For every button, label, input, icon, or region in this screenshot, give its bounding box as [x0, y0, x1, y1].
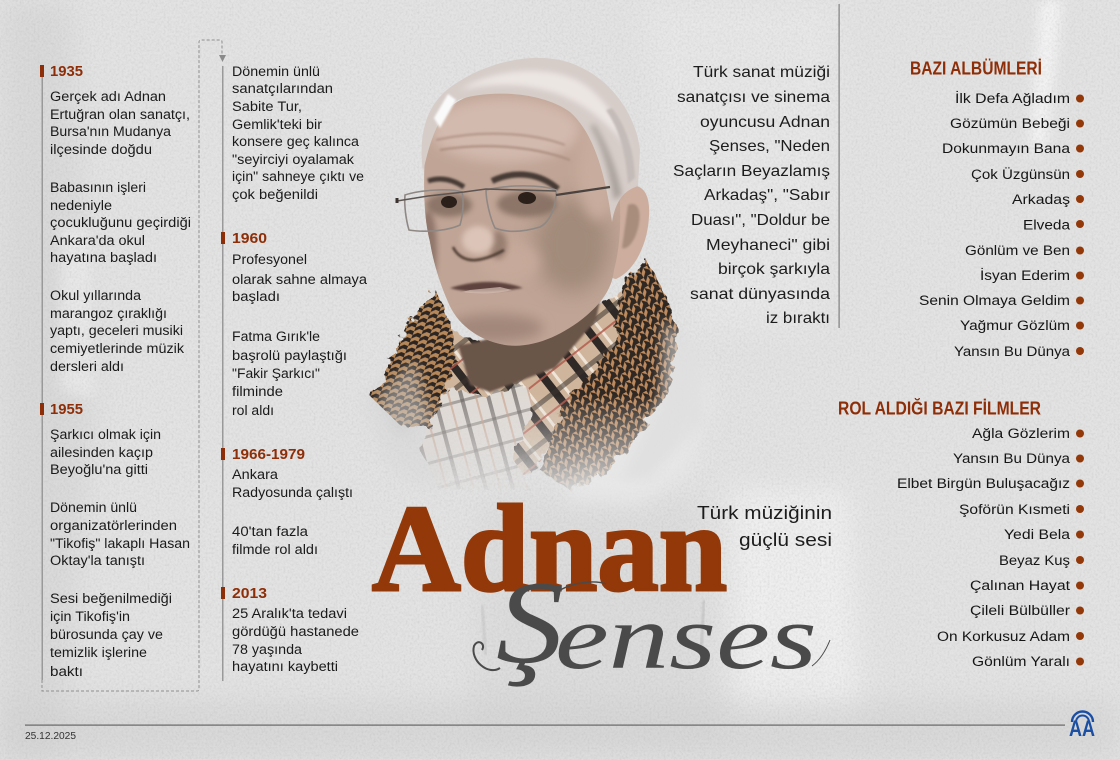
intro paragraph: oyuncusu Adnan	[700, 114, 830, 131]
neck	[458, 300, 600, 392]
entry 1955: baktı	[50, 664, 83, 679]
eyebrows	[428, 179, 464, 187]
timeline connector: dashed path with arrow	[42, 40, 226, 691]
album items: Gönlüm ve Ben	[965, 243, 1070, 258]
entry 1935: Ankara'da okul	[50, 233, 145, 248]
entry 1935: Ertuğran olan sanatçı,	[50, 107, 190, 122]
film items: On Korkusuz Adam	[937, 629, 1070, 644]
entry 1966-1979	[221, 446, 353, 557]
intro paragraph: sanat dünyasında	[690, 286, 830, 303]
entry 1935: Okul yıllarında	[50, 288, 142, 303]
column 2 timeline text	[221, 64, 368, 674]
entry 1935: marangoz çıraklığı	[50, 306, 167, 321]
album items: İsyan Ederim	[980, 268, 1070, 283]
album items: Elveda	[1023, 218, 1071, 232]
album items: İlk Defa Ağladım	[955, 91, 1070, 106]
continuation of 1955	[232, 64, 364, 202]
continuation of 1955: "seyirciyi oyalamak	[232, 152, 354, 167]
left collar	[369, 290, 458, 430]
film items: Yansın Bu Dünya	[953, 451, 1071, 466]
intro paragraph: Duası", "Doldur be	[691, 212, 830, 229]
column 1 timeline text	[40, 63, 191, 679]
portrait of Adnan Şenses	[369, 58, 704, 502]
intro paragraph: birçok şarkıyla	[718, 261, 830, 278]
entry 1960: başladı	[232, 289, 280, 304]
continuation of 1955: Dönemin ünlü	[232, 64, 320, 79]
intro paragraph: Türk sanat müziği	[693, 64, 830, 81]
film items	[897, 426, 1084, 669]
continuation of 1955: Sabite Tur,	[232, 99, 302, 114]
eyes	[441, 196, 457, 208]
glasses	[397, 186, 610, 231]
album items: Arkadaş	[1012, 192, 1070, 207]
entry 1966-1979: 40'tan fazla	[232, 524, 309, 539]
wash over collar edges	[620, 320, 705, 480]
entry 1935: Bursa'nın Mudanya	[50, 124, 172, 139]
albums list	[910, 58, 1084, 359]
entry 1935: 1935	[50, 63, 83, 80]
films list	[838, 398, 1084, 669]
album items: Gözümün Bebeği	[950, 116, 1070, 131]
tagline: Türk müziğinin	[697, 503, 832, 523]
entry 1955: Oktay'la tanıştı	[50, 553, 145, 568]
entry 1960: olarak sahne almaya	[232, 272, 368, 287]
film items: Yedi Bela	[1004, 527, 1071, 542]
entry 1955: temizlik işlerine	[50, 645, 147, 660]
entry 1955	[40, 401, 190, 679]
intro paragraph: sanatçısı ve sinema	[677, 89, 830, 106]
entry 1935: ilçesinde doğdu	[50, 142, 152, 157]
entry 1960	[221, 230, 368, 418]
entry 1960: filminde	[232, 384, 283, 399]
film items: Çalınan Hayat	[970, 578, 1070, 593]
entry 1960: 1960	[232, 230, 267, 247]
continuation of 1955: çok beğenildi	[232, 187, 318, 202]
intro paragraph: Meyhaneci" gibi	[706, 237, 830, 254]
album items: Çok Üzgünsün	[971, 167, 1070, 182]
continuation of 1955: sanatçılarından	[232, 81, 333, 96]
ear	[604, 186, 649, 279]
album items: Senin Olmaya Geldim	[919, 293, 1070, 308]
scarf centre	[444, 290, 623, 475]
entry 1935: yaptı, geceleri musiki	[50, 323, 183, 338]
entry 1955: organizatörlerinden	[50, 518, 177, 533]
film items: Ağla Gözlerim	[972, 426, 1070, 441]
albums heading: BAZI ALBÜMLERİ	[910, 58, 1042, 78]
entry 1935: çocukluğunu geçirdiği	[50, 215, 191, 230]
timeline left rail	[42, 66, 43, 680]
mouth	[450, 282, 523, 292]
films heading: ROL ALDIĞI BAZI FİLMLER	[838, 398, 1041, 418]
film items: Elbet Birgün Buluşacağız	[897, 476, 1070, 491]
entry 2013: gördüğü hastanede	[232, 624, 359, 639]
entry 1955: 1955	[50, 401, 83, 418]
entry 1960: Fatma Gırık'le	[232, 329, 320, 344]
continuation of 1955: Gemlik'teki bir	[232, 117, 323, 132]
entry 1960: Profesyonel	[232, 252, 307, 267]
entry 1955: "Tikofiş" lakaplı Hasan	[50, 536, 190, 551]
entry 1955: bürosunda çay ve	[50, 627, 163, 642]
entry 1966-1979: filmde rol aldı	[232, 542, 318, 557]
date: 25.12.2025	[25, 731, 76, 742]
footer rule	[25, 724, 1065, 726]
entry 1935: Gerçek adı Adnan	[50, 89, 166, 104]
entry 1935: cemiyetlerinde müzik	[50, 341, 184, 356]
entry 1955: için Tikofiş'in	[50, 609, 130, 624]
entry 1966-1979: Radyosunda çalıştı	[232, 485, 353, 500]
intro paragraph	[673, 64, 831, 327]
album items: Yansın Bu Dünya	[954, 344, 1071, 359]
entry 1955: Şarkıcı olmak için	[50, 427, 161, 442]
hair	[422, 58, 640, 222]
film items: Beyaz Kuş	[999, 553, 1070, 568]
entry 2013: 25 Aralık'ta tedavi	[232, 606, 347, 621]
entry 1935: nedeniyle	[50, 198, 112, 213]
head skin	[424, 88, 620, 346]
timeline right rail	[222, 66, 224, 681]
film items: Şoförün Kısmeti	[959, 502, 1070, 517]
intro paragraph: Saçların Beyazlamış	[673, 163, 830, 180]
entry 1955: Sesi beğenilmediği	[50, 591, 172, 606]
entry 2013: 78 yaşında	[232, 642, 303, 657]
album items: Yağmur Gözlüm	[960, 318, 1070, 333]
entry 1935: dersleri aldı	[50, 359, 124, 374]
entry 2013	[221, 585, 359, 674]
vertical divider	[838, 4, 840, 328]
album items	[919, 91, 1084, 359]
coat collar and scarf	[369, 258, 679, 491]
entry 1955: Beyoğlu'na gitti	[50, 462, 148, 477]
entry 1935: hayatına başladı	[50, 250, 157, 265]
continuation of 1955: için" sahneye çıktı ve	[232, 169, 364, 184]
nose	[462, 226, 494, 254]
right collar	[540, 258, 679, 491]
face shading	[419, 98, 618, 342]
album items: Dokunmayın Bana	[942, 141, 1071, 156]
entry 2013: hayatını kaybetti	[232, 659, 338, 674]
entry 2013: 2013	[232, 585, 267, 602]
entry 1935: Babasının işleri	[50, 180, 146, 195]
entry 1966-1979: 1966-1979	[232, 446, 305, 463]
title: Şenses: Ş	[496, 557, 564, 688]
continuation of 1955: konsere geç kalınca	[232, 134, 360, 149]
entry 1960: rol aldı	[232, 403, 274, 418]
tagline: güçlü sesi	[739, 530, 832, 550]
intro paragraph: Şenses, "Neden	[709, 138, 830, 155]
tagline	[697, 503, 832, 550]
entry 1960: "Fakir Şarkıcı"	[232, 366, 320, 381]
entry 1955: ailesinden kaçıp	[50, 445, 153, 460]
intro paragraph: iz bıraktı	[766, 310, 830, 327]
entry 1960: başrolü paylaştığı	[232, 348, 347, 363]
film items: Çileli Bülbüller	[970, 603, 1071, 618]
entry 1935	[40, 63, 191, 374]
title: Şenses: enses	[555, 586, 817, 688]
watercolor wash	[560, 340, 712, 505]
title: Adnan: Adnan	[372, 480, 727, 617]
film items: Gönlüm Yaralı	[972, 654, 1070, 669]
intro paragraph: Arkadaş", "Sabır	[704, 187, 831, 204]
title: Şenses	[473, 557, 830, 688]
entry 1955: Dönemin ünlü	[50, 500, 137, 515]
torn light patch	[420, 384, 533, 490]
entry 1966-1979: Ankara	[232, 467, 279, 482]
icon: AA logo: AA	[1069, 716, 1095, 741]
